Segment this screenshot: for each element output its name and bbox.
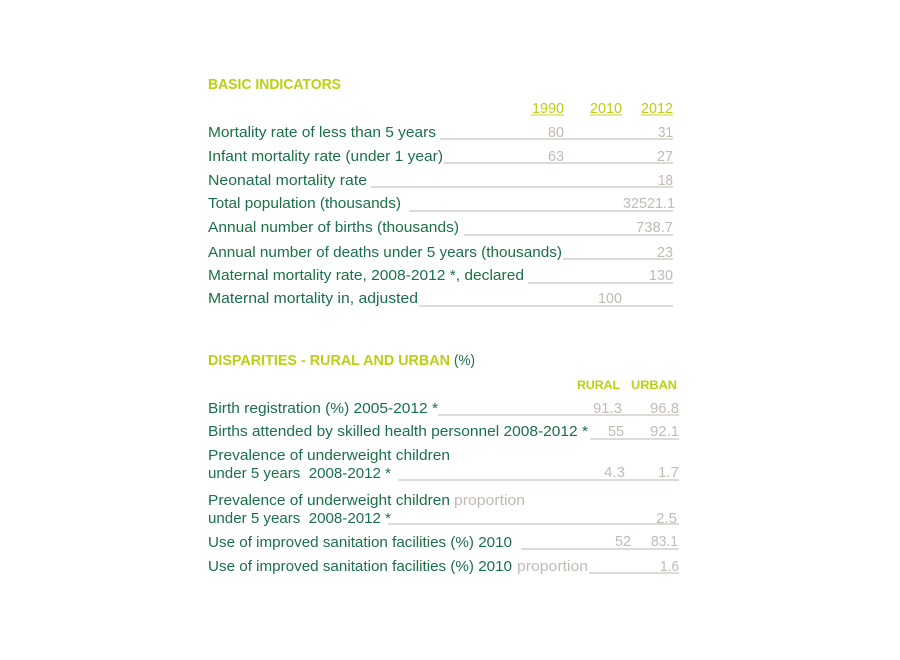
row: improved sanitation proportion: 1.6 xyxy=(660,558,679,575)
row: infant mortality rate: Infant mortality rate (under 1 year) xyxy=(208,148,443,165)
row: births attended by skilled personnel: Births attended by skilled health personnel 2008-2012 * xyxy=(208,423,588,440)
row: infant mortality rate: 63 xyxy=(548,148,564,165)
row: maternal mortality declared xyxy=(208,267,673,284)
row: total population: 32521.1 xyxy=(623,195,675,212)
heading: disparities: DISPARITIES - RURAL AND URBAN xyxy=(208,352,450,369)
row: improved sanitation proportion: proportion xyxy=(517,558,588,575)
row: annual deaths under 5: 23 xyxy=(657,244,673,261)
row: prevalence of underweight children: 1.7 xyxy=(658,464,679,481)
row: maternal mortality declared: 130 xyxy=(649,267,673,284)
row: prevalence of underweight children xyxy=(208,447,679,482)
row: prevalence of underweight children: Prevalence of underweight children xyxy=(208,447,450,464)
row: infant mortality rate: 27 xyxy=(657,148,673,165)
row: neonatal mortality rate: Neonatal mortality rate xyxy=(208,172,367,189)
row: maternal mortality adjusted: Maternal mortality in, adjusted xyxy=(208,290,418,307)
row: maternal mortality adjusted xyxy=(208,290,673,307)
row: annual births: Annual number of births (thousands) xyxy=(208,219,459,236)
row: improved sanitation proportion xyxy=(208,558,679,575)
row: mortality rate under 5: 80 xyxy=(548,124,564,141)
panel: basic indicators xyxy=(208,76,675,307)
column headers: years: 2012 xyxy=(641,100,673,117)
row: births attended by skilled personnel: 55 xyxy=(608,423,624,440)
row: neonatal mortality rate: 18 xyxy=(658,172,673,189)
row: total population xyxy=(208,195,675,212)
row: total population: Total population (thousands) xyxy=(208,195,401,212)
row: improved sanitation: Use of improved sanitation facilities (%) 2010 xyxy=(208,534,512,551)
row: prevalence of underweight children proportion: proportion xyxy=(454,492,525,509)
row: birth registration: 96.8 xyxy=(650,400,679,417)
row: maternal mortality declared: Maternal mortality rate, 2008-2012 *, declared xyxy=(208,267,524,284)
column headers: rural and urban: RURAL xyxy=(577,378,620,392)
panel: disparities rural and urban xyxy=(208,352,679,575)
row: mortality rate under 5: Mortality rate of less than 5 years xyxy=(208,124,436,141)
heading: disparities: (%) xyxy=(454,352,475,369)
column headers: rural and urban xyxy=(577,378,677,392)
row: prevalence of underweight children proportion xyxy=(208,492,679,527)
row: mortality rate under 5 xyxy=(208,124,673,141)
row: annual births xyxy=(208,219,673,236)
row: prevalence of underweight children proportion: Prevalence of underweight children xyxy=(208,492,450,509)
column headers: years xyxy=(531,100,673,117)
row: improved sanitation xyxy=(208,533,679,551)
row: birth registration xyxy=(208,400,679,417)
row: improved sanitation: 52 xyxy=(615,533,631,550)
row: mortality rate under 5: 31 xyxy=(658,124,673,141)
row: prevalence of underweight children: 4.3 xyxy=(604,464,625,481)
row: birth registration: 91.3 xyxy=(593,400,622,417)
heading: basic indicators: BASIC INDICATORS xyxy=(208,76,341,93)
column headers: years: 2010 xyxy=(590,100,622,117)
row: prevalence of underweight children proportion: 2.5 xyxy=(656,510,677,527)
column headers: rural and urban: URBAN xyxy=(631,378,677,392)
row: birth registration: Birth registration (%) 2005-2012 * xyxy=(208,400,438,417)
row: neonatal mortality rate xyxy=(208,172,673,189)
row: births attended by skilled personnel: 92.1 xyxy=(650,423,679,440)
row: prevalence of underweight children: under 5 years 2008-2012 * xyxy=(208,465,391,482)
row: improved sanitation proportion: Use of improved sanitation facilities (%) 2010 xyxy=(208,558,512,575)
row: annual births: 738.7 xyxy=(636,219,673,236)
row: improved sanitation: 83.1 xyxy=(651,533,678,550)
row: maternal mortality adjusted: 100 xyxy=(598,290,622,307)
row: prevalence of underweight children proportion: under 5 years 2008-2012 * xyxy=(208,510,391,527)
column headers: years: 1990 xyxy=(532,100,564,117)
row: annual deaths under 5: Annual number of deaths under 5 years (thousands) xyxy=(208,244,562,261)
row: infant mortality rate xyxy=(208,148,673,165)
